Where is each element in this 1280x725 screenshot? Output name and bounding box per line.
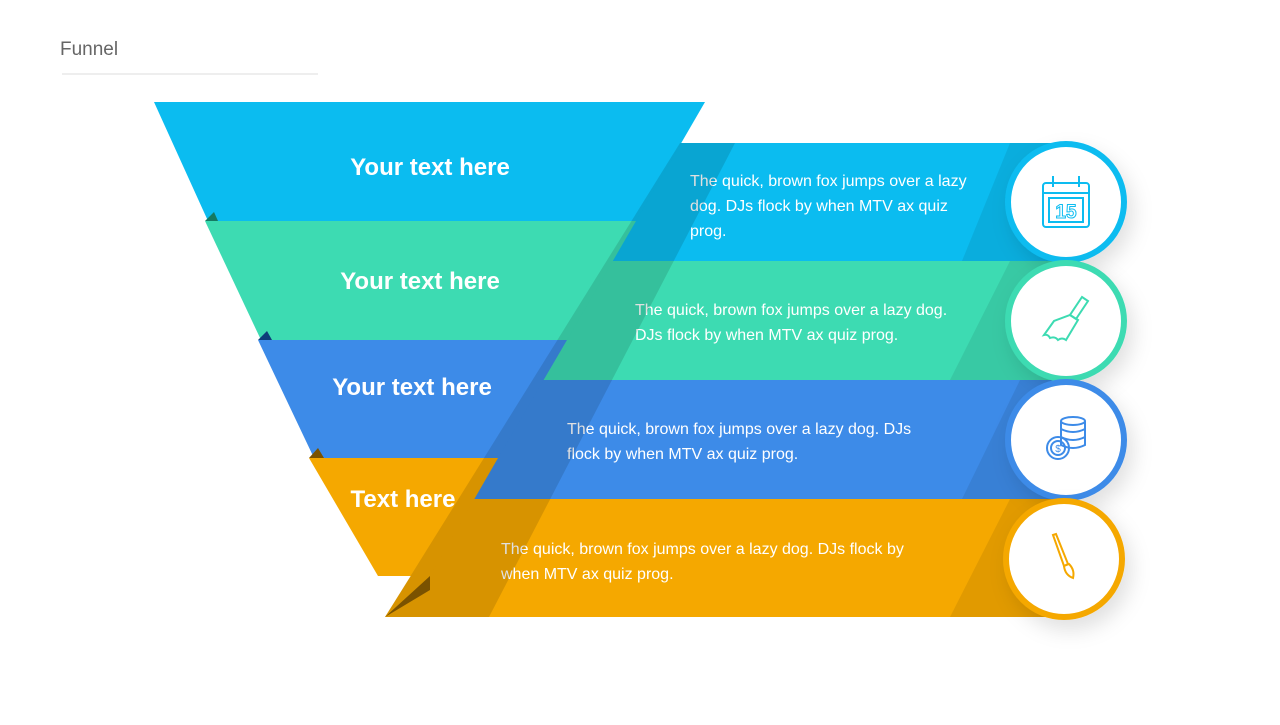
funnel tier 1: Your text here: [350, 154, 510, 181]
funnel tier 4: Text here: [351, 486, 455, 513]
icon circle: calendar: 15: [1055, 202, 1077, 223]
ribbon band: cyan: [607, 143, 1060, 261]
text: band 2 description: The quick, brown fox jumps over a lazy dog.: [635, 302, 947, 319]
ribbon band: orange: [385, 499, 1060, 617]
funnel tier 3: [258, 340, 567, 458]
title: Funnel: [60, 39, 118, 60]
funnel tier 3: Your text here: [332, 374, 492, 401]
text: band 2 description: DJs flock by when MTV ax quiz prog.: [635, 327, 898, 344]
funnel: [154, 102, 705, 576]
text: band 1 description: dog. DJs flock by when MTV ax quiz: [690, 198, 948, 215]
funnel tier 2: [205, 221, 636, 340]
icon circle: calendar: [1008, 144, 1124, 260]
funnel tier 4: [309, 458, 498, 576]
text: band 3 description: The quick, brown fox jumps over a lazy dog. DJs: [567, 421, 911, 438]
text: band 1 description: The quick, brown fox jumps over a lazy: [690, 173, 967, 190]
icon circle: paint brush: [1008, 263, 1124, 379]
icon circle: coins: $: [1055, 444, 1061, 455]
text: band 3 description: flock by when MTV ax quiz prog.: [567, 446, 798, 463]
ribbon band: teal: [533, 261, 1060, 380]
text: band 4 description: when MTV ax quiz prog.: [500, 566, 674, 583]
diagonal strip overlay: [385, 143, 735, 617]
icon circle: coins: [1008, 382, 1124, 498]
funnel tier 1: [154, 102, 705, 221]
text: band 4 description: The quick, brown fox jumps over a lazy dog. DJs flock by: [501, 541, 904, 558]
funnel tier 2: Your text here: [340, 268, 500, 295]
ribbon band: blue: [459, 380, 1060, 499]
text: band 1 description: prog.: [690, 223, 726, 240]
icon circle: artist brush: [1006, 501, 1122, 617]
